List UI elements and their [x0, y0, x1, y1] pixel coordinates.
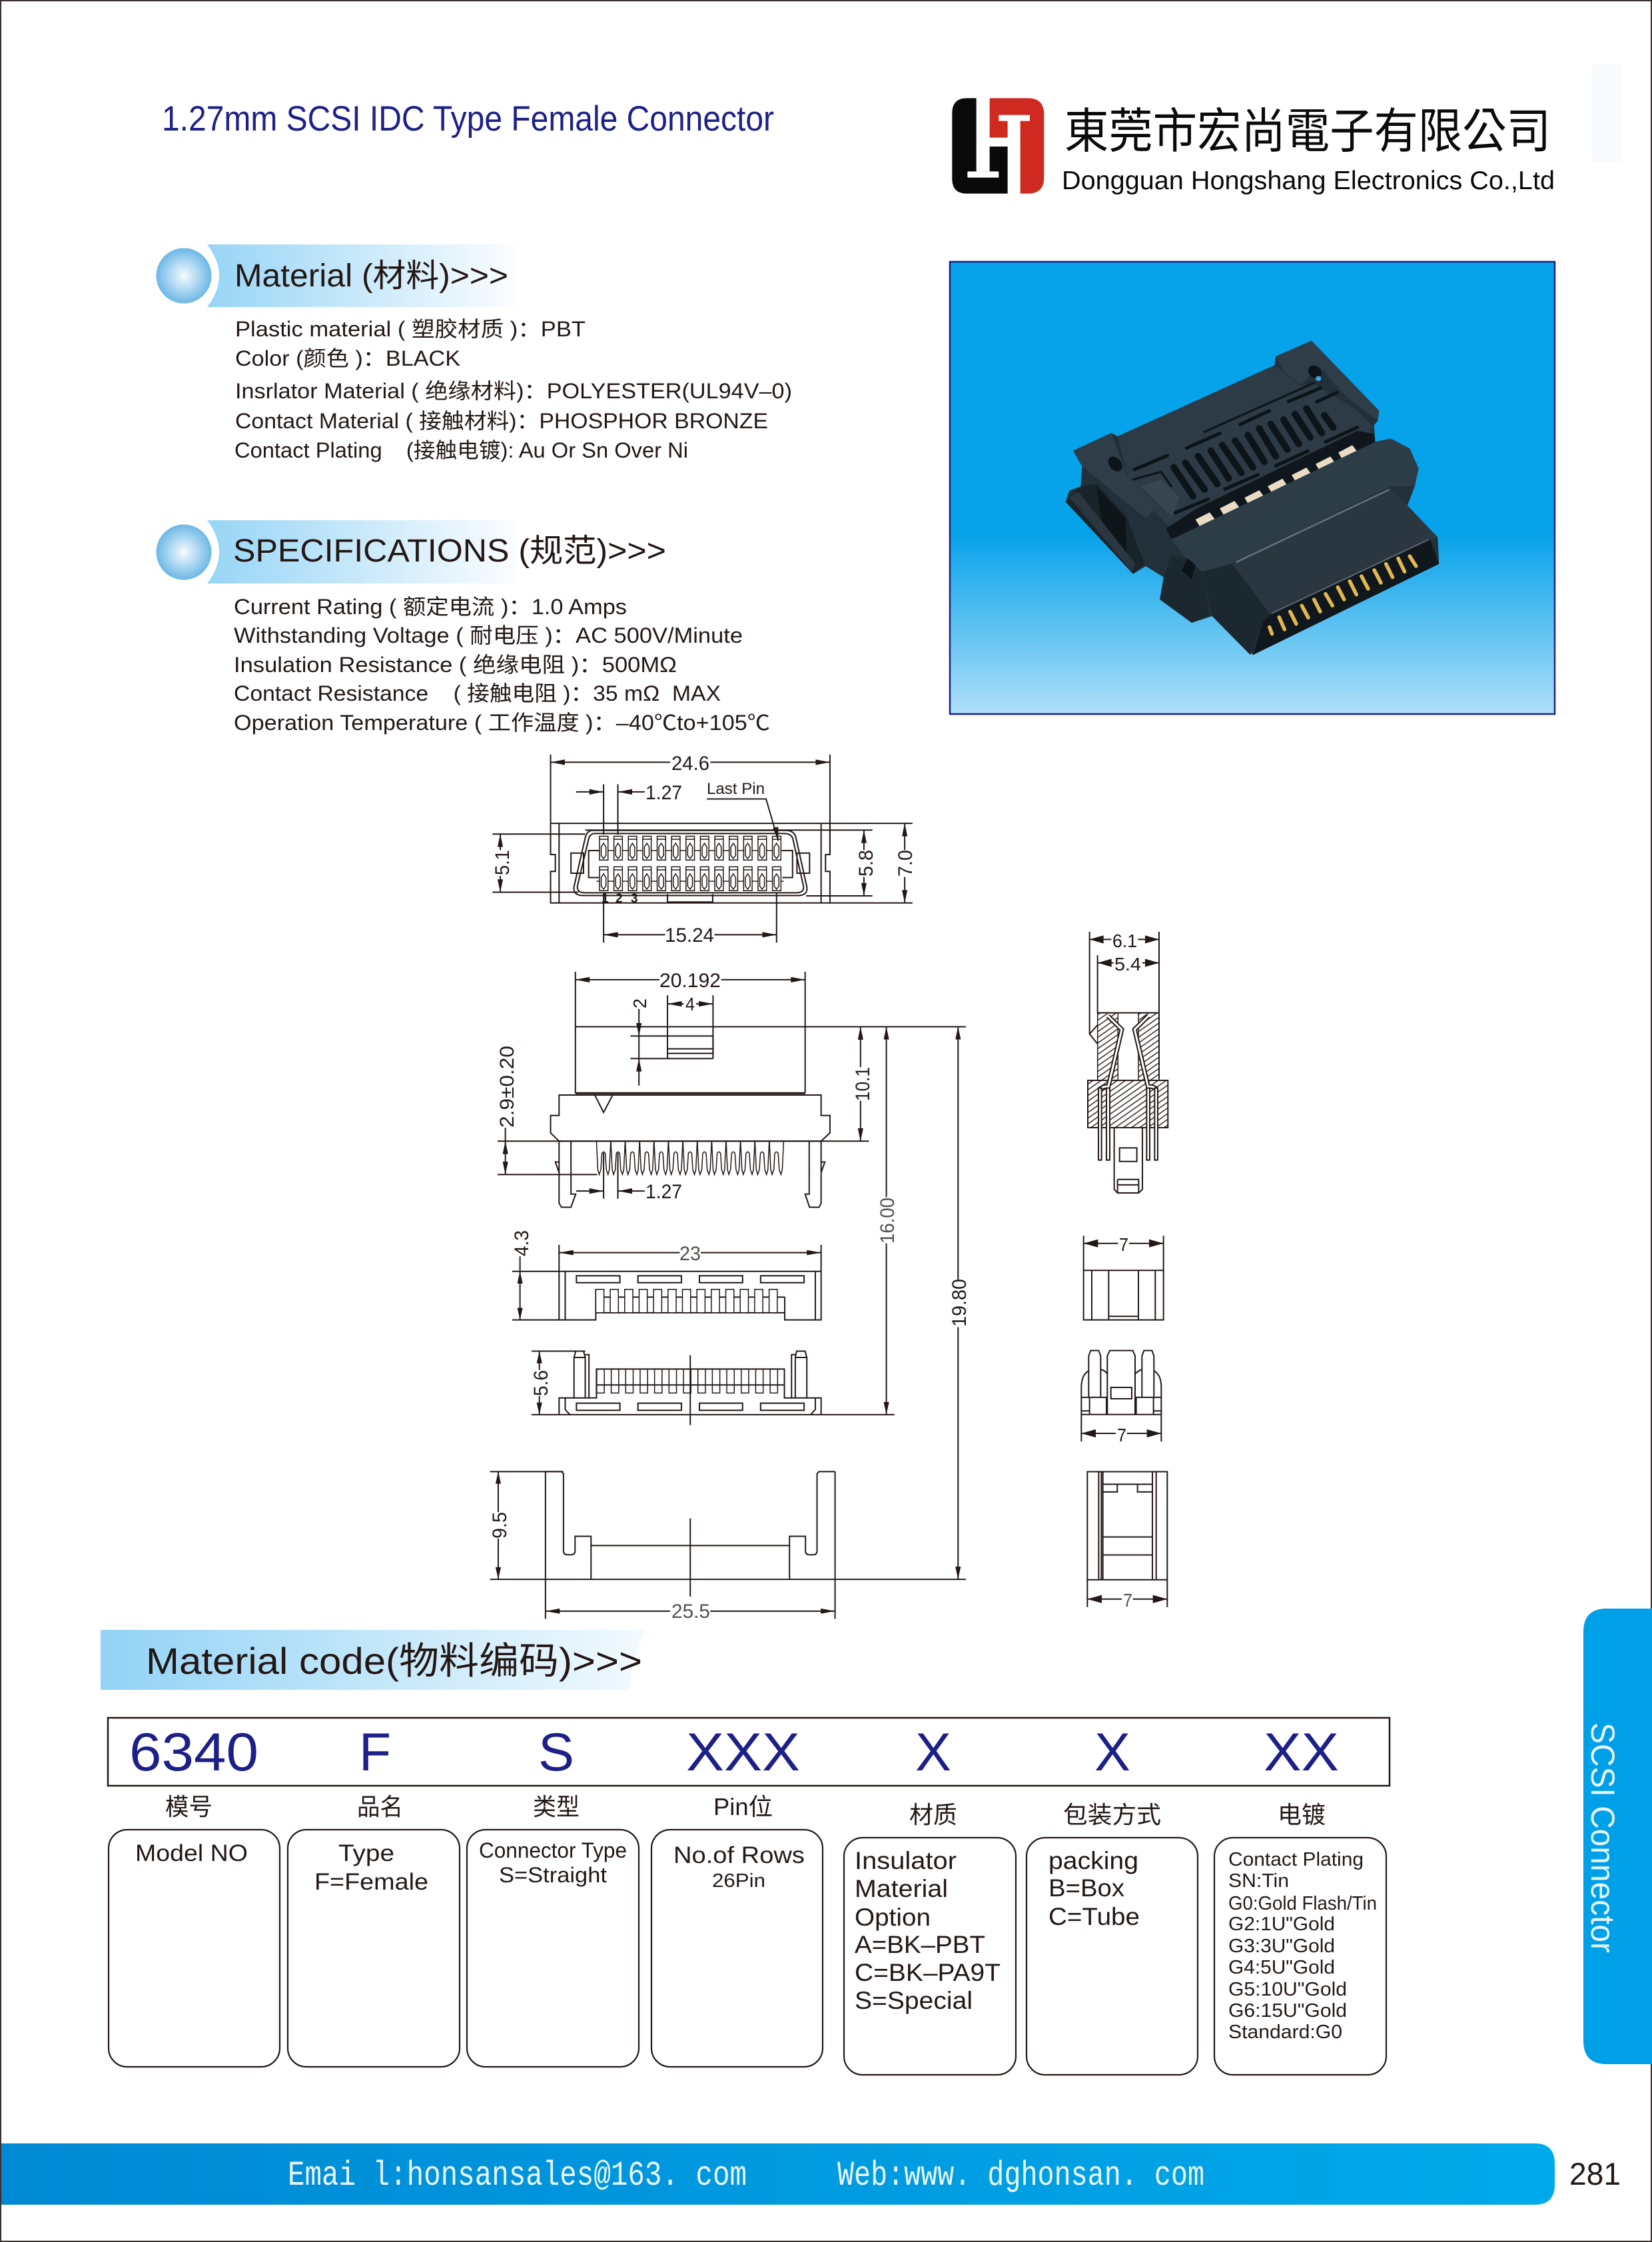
technical drawing: side elevation with latch posts	[530, 1351, 895, 1425]
technical drawing: latch profile: 25.5	[671, 1601, 710, 1623]
heading: specifications	[156, 520, 666, 583]
code strip: 6340	[129, 1722, 258, 1782]
technical drawing: front view with overall height dimensions: 19.80	[949, 1279, 971, 1327]
box: contact plating: Contact Plating	[1228, 1849, 1364, 1870]
technical drawing: bottom view: 23	[679, 1243, 701, 1265]
title: 1.27mm SCSI IDC Type Female Connector	[162, 99, 774, 139]
logo: company mark	[952, 98, 1044, 194]
box: contact plating: G5:10U"Gold	[1228, 1979, 1347, 2000]
technical drawing: front view with overall height dimensions	[496, 970, 971, 1579]
code field labels: 品名	[357, 1793, 403, 1820]
company name	[1062, 105, 1555, 195]
box: connector type: S=Straight	[499, 1863, 607, 1887]
box: number of rows: No.of Rows	[673, 1842, 805, 1868]
box: contact plating: Standard:G0	[1228, 2022, 1342, 2043]
technical drawing: front view with overall height dimensions: 16.00	[877, 1198, 899, 1244]
technical drawing: top view with contact pattern: 7.0	[895, 850, 917, 877]
box: connector type: Connector Type	[479, 1838, 627, 1862]
specification list: Operation Temperature ( 工作温度 )：–40℃to+105℃	[234, 711, 770, 735]
box: contact plating: SN:Tin	[1228, 1870, 1289, 1892]
code strip: S	[538, 1722, 574, 1782]
box: packing: B=Box	[1048, 1874, 1125, 1902]
specification list: Current Rating ( 额定电流 )：1.0 Amps	[234, 595, 627, 619]
code strip	[108, 1718, 1390, 1786]
technical drawing: cross section with hatching: 6.1	[1112, 931, 1137, 951]
technical drawing: top view with contact pattern: 1	[602, 892, 609, 906]
technical drawing: top view with contact pattern: Last Pin	[707, 780, 765, 798]
box: insulator material: S=Special	[855, 1987, 973, 2014]
code field labels	[165, 1793, 1326, 1828]
code field labels: 类型	[533, 1793, 580, 1820]
material property list: Contact Plating (接触电镀): Au Or Sn Over Ni	[234, 438, 688, 462]
footer contact bar	[1, 2143, 1555, 2205]
technical drawing: end views	[1081, 1234, 1167, 1611]
code field labels: 模号	[165, 1793, 212, 1820]
box: insulator material: C=BK–PA9T	[855, 1959, 1001, 1986]
specification list	[234, 595, 770, 735]
material property list: Contact Material ( 接触材料)：PHOSPHOR BRONZE	[235, 409, 768, 433]
technical drawing: top view with contact pattern	[492, 753, 917, 946]
box: connector type	[467, 1830, 639, 2067]
box: model number: Model NO	[135, 1840, 248, 1866]
heading: specifications: SPECIFICATIONS (规范)>>>	[233, 534, 666, 569]
footer contact bar: Emai l:honsansales@163. com	[288, 2156, 747, 2195]
specification list: Contact Resistance ( 接触电阻 )：35 mΩ MAX	[234, 681, 721, 705]
box: insulator material: Insulator	[855, 1847, 957, 1874]
technical drawing: end views: 7	[1119, 1234, 1128, 1255]
heading: material: Material (材料)>>>	[234, 258, 508, 294]
technical drawing: top view with contact pattern: 24.6	[671, 753, 709, 775]
material property list	[234, 317, 792, 462]
technical drawing: front view with overall height dimensions: 2	[629, 998, 650, 1008]
heading: material	[156, 244, 516, 307]
technical drawing: front view with overall height dimensions: 1.27	[645, 1181, 682, 1203]
technical drawing: top view with contact pattern: 3	[631, 892, 638, 906]
faint decorative block top right	[1591, 65, 1621, 162]
technical drawing: end views: 7	[1117, 1425, 1126, 1445]
box: insulator material	[844, 1838, 1016, 2075]
box: insulator material: Option	[855, 1904, 931, 1931]
box: contact plating	[1214, 1838, 1386, 2075]
code field labels: Pin位	[713, 1793, 773, 1820]
footer contact bar: Web:www. dghonsan. com	[837, 2156, 1204, 2195]
technical drawing: top view with contact pattern: 5.1	[492, 850, 514, 875]
side tab: SCSI Connector: SCSI Connector	[1584, 1722, 1621, 1953]
technical drawing: latch profile: 9.5	[489, 1512, 511, 1539]
company name: 東莞市宏尚電子有限公司	[1064, 105, 1551, 159]
technical drawing: cross section with hatching: 5.4	[1114, 954, 1141, 974]
box: contact plating: G4:5U"Gold	[1228, 1957, 1335, 1978]
technical drawing: top view with contact pattern: 5.8	[855, 850, 877, 877]
icon: connector product illustration	[1066, 341, 1439, 655]
box: packing: C=Tube	[1048, 1903, 1140, 1930]
material property list: Plastic material ( 塑胶材质 )：PBT	[235, 317, 586, 341]
material property list: Color (颜色 )：BLACK	[235, 346, 460, 370]
specification list: Insulation Resistance ( 绝缘电阻 )：500MΩ	[234, 653, 677, 677]
technical drawing: end views: 7	[1123, 1590, 1132, 1611]
box: type	[288, 1830, 460, 2067]
technical drawing: front view with overall height dimensions: 10.1	[852, 1067, 874, 1101]
code strip: X	[915, 1722, 951, 1782]
box: contact plating: G2:1U"Gold	[1228, 1914, 1335, 1935]
code field labels: 材质	[909, 1801, 957, 1828]
code strip: XX	[1264, 1722, 1339, 1782]
technical drawing: top view with contact pattern: 2	[616, 892, 623, 906]
box: type: F=Female	[314, 1869, 428, 1895]
technical drawing: latch profile	[489, 1471, 966, 1623]
box: contact plating: G0:Gold Flash/Tin	[1228, 1893, 1377, 1914]
code strip: F	[359, 1722, 391, 1782]
page number: 281	[1569, 2156, 1621, 2191]
technical drawing: front view with overall height dimensions: 20.192	[659, 970, 721, 992]
technical drawing: top view with contact pattern: 15.24	[665, 925, 714, 946]
technical drawing: top view with contact pattern: 1.27	[645, 782, 682, 804]
panel: specifications	[156, 520, 770, 735]
material property list: Insrlator Material ( 绝缘材料)：POLYESTER(UL94V–0)	[235, 379, 792, 403]
code strip: X	[1094, 1722, 1130, 1782]
technical drawing: side elevation with latch posts: 5.6	[530, 1370, 552, 1396]
heading: material code: Material code(物料编码)>>>	[146, 1640, 642, 1682]
technical drawing: bottom view: 4.3	[511, 1230, 533, 1256]
box: contact plating: G3:3U"Gold	[1228, 1936, 1335, 1957]
box: contact plating: G6:15U"Gold	[1228, 2000, 1347, 2022]
technical drawing: bottom view	[511, 1230, 821, 1320]
box: insulator material: Material	[855, 1875, 948, 1902]
side tab: SCSI Connector	[1583, 1609, 1652, 2064]
specification list: Withstanding Voltage ( 耐电压 )：AC 500V/Minute	[234, 623, 743, 647]
box: insulator material: A=BK–PBT	[855, 1931, 985, 1958]
product photo panel	[950, 262, 1555, 714]
code field labels: 包装方式	[1063, 1801, 1161, 1828]
box: type: Type	[338, 1840, 394, 1866]
heading: material code	[101, 1630, 645, 1690]
code field labels: 电镀	[1278, 1801, 1326, 1828]
panel: material	[156, 244, 792, 462]
company name: Dongguan Hongshang Electronics Co.,Ltd	[1062, 167, 1555, 195]
technical drawing: cross section with hatching	[1088, 931, 1168, 1193]
code strip: XXX	[686, 1722, 800, 1782]
technical drawing: front view with overall height dimensions: 2.9±0.20	[496, 1046, 518, 1128]
box: number of rows: 26Pin	[712, 1870, 765, 1892]
box: packing	[1027, 1838, 1198, 2075]
technical drawing: front view with overall height dimensions: 4	[685, 994, 695, 1014]
box: packing: packing	[1048, 1847, 1138, 1874]
box: model number	[109, 1830, 280, 2067]
box: number of rows	[651, 1830, 823, 2067]
